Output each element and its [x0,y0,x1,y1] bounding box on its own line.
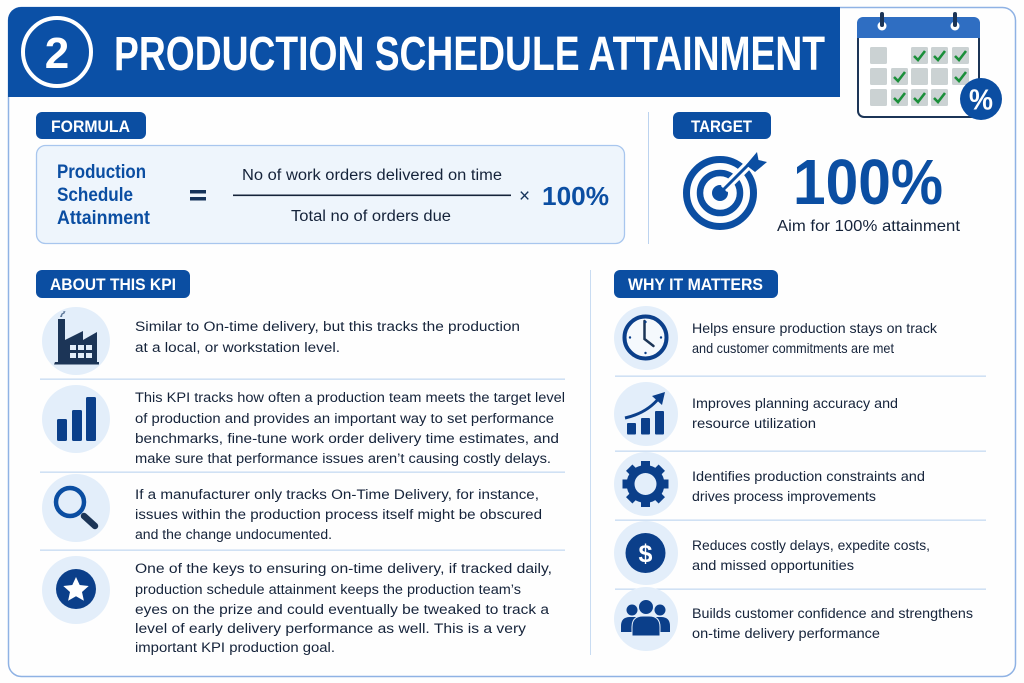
text: keys to on-time delivery: level of early delivery performance as well. This is a very [135,621,527,637]
target value: 100% [793,146,943,218]
panel: target [673,112,961,235]
text: planning accuracy: Improves planning accuracy and [692,396,898,411]
fraction [233,167,511,225]
formula label: Production [57,162,146,183]
text: keys to on-time delivery: production schedule attainment keeps the production team’s [135,582,521,598]
formula box [36,146,624,244]
text: costly delays: Reduces costly delays, expedite costs, [692,538,930,553]
text: planning accuracy [692,396,898,431]
icon: bar chart [42,385,110,453]
text: on-time delivery only: and the change undocumented. [135,527,332,543]
icon: gear [614,452,678,516]
icon: factory [42,307,110,375]
icon: people [614,587,678,651]
heading: formula: FORMULA [51,117,130,136]
icon: dollar: $ [639,540,653,568]
number badge [23,18,91,86]
text: similar to on-time delivery [135,319,520,356]
icon: target with arrow [686,152,767,226]
text: similar to on-time delivery: Similar to On-time delivery, but this tracks the production [135,319,520,335]
fraction: No of work orders delivered on time [242,167,502,184]
text: keys to on-time delivery: One of the keys to ensuring on-time delivery, if tracked daily, [135,561,552,577]
text: on track: and customer commitments are met [692,341,894,356]
text: planning accuracy: resource utilization [692,416,816,431]
icon: calendar with checks and percent: % [969,84,993,116]
text: similar to on-time delivery: at a local, or workstation level. [135,340,340,356]
text: keys to on-time delivery [135,561,552,656]
target caption: Aim for 100% attainment [777,218,961,235]
text: KPI tracks how often [135,390,565,467]
icon: star badge [42,556,110,624]
multiply by 100%: × [519,186,530,207]
text: KPI tracks how often: This KPI tracks how often a production team meets the target level [135,390,565,406]
text: KPI tracks how often: make sure that performance issues aren’t causing costly delays. [135,451,551,467]
text: customer confidence: Builds customer confidence and strengthens [692,606,973,621]
text: customer confidence [692,606,973,641]
icon: growth chart [614,382,678,446]
text: KPI tracks how often: of production and provides an important way to set performance [135,411,554,427]
formula label [57,162,151,229]
formula label: Schedule [57,185,133,206]
text: costly delays: and missed opportunities [692,558,854,573]
number badge: 2 [45,29,69,78]
text: customer confidence: on-time delivery performance [692,626,880,641]
panel: formula [36,112,624,244]
equals sign [190,190,206,200]
heading: target [673,112,771,139]
icon: dollar [614,521,678,585]
text: on-time delivery only [135,487,542,543]
heading: why it matters: WHY IT MATTERS [628,275,763,294]
multiply by 100%: 100% [542,181,609,211]
header banner [8,7,840,97]
formula label: Attainment [57,208,151,229]
text: costly delays [692,538,930,573]
panel: why it matters [614,270,986,651]
text: keys to on-time delivery: eyes on the prize and could eventually be tweaked to track a [135,602,549,618]
text: constraints [692,469,925,504]
icon: clock [614,306,678,370]
heading: formula [36,112,146,139]
title: PRODUCTION SCHEDULE ATTAINMENT [114,28,825,81]
text: on-time delivery only: If a manufacturer only tracks On-Time Delivery, for instance, [135,487,539,503]
heading: why it matters [614,270,778,298]
heading: target: TARGET [691,117,753,136]
heading: about this KPI [36,270,190,298]
text: constraints: Identifies production constraints and [692,469,925,484]
text: on track: Helps ensure production stays on track [692,321,937,336]
text: constraints: drives process improvements [692,489,876,504]
panel: about this KPI [36,270,565,656]
icon: calendar with checks and percent [857,12,1002,120]
text: keys to on-time delivery: important KPI production goal. [135,640,335,656]
icon: magnifying glass [42,474,110,542]
fraction: Total no of orders due [291,208,451,225]
text: on track [692,321,937,356]
text: on-time delivery only: issues within the production process itself might be obscured [135,507,542,523]
heading: about this KPI: ABOUT THIS KPI [50,275,176,294]
text: KPI tracks how often: benchmarks, fine-tune work order delivery time estimates, and [135,431,559,447]
